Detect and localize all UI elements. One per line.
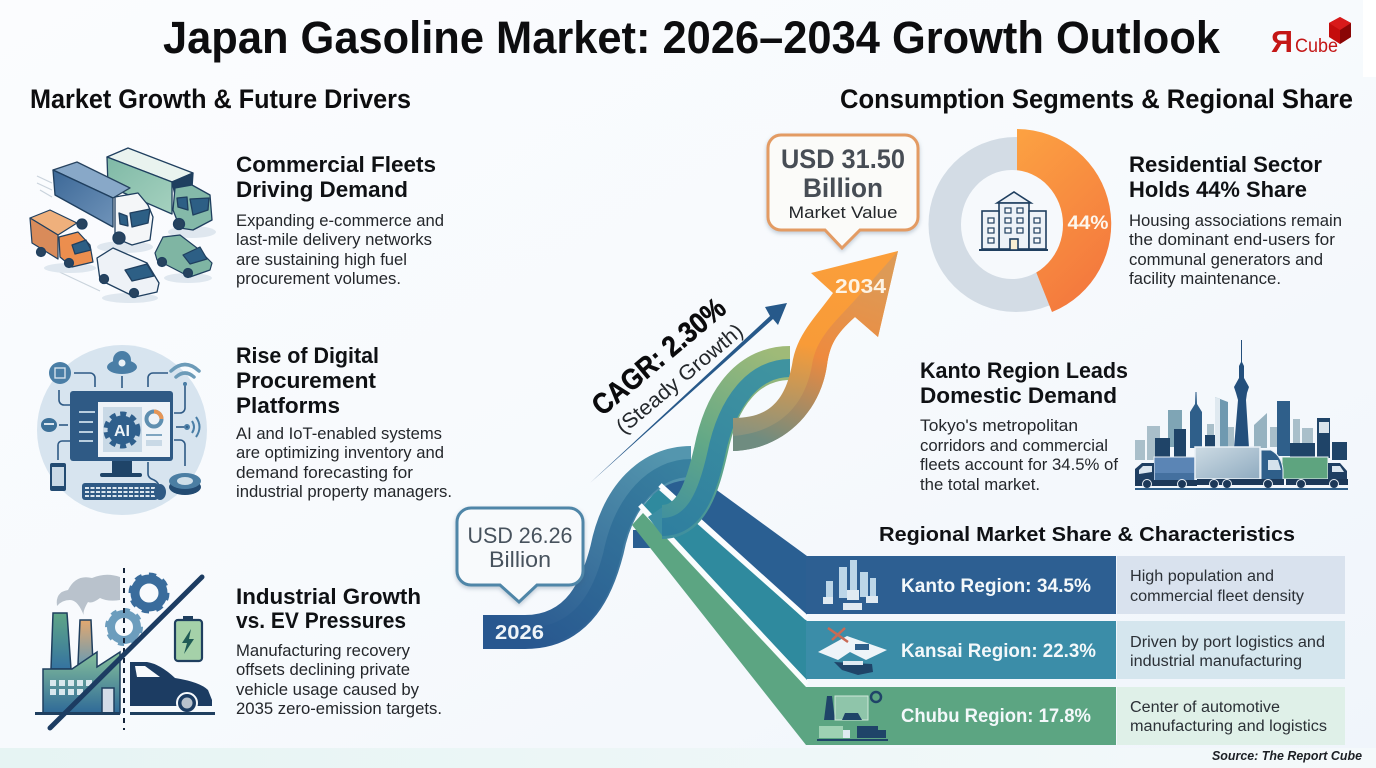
monitor — [70, 391, 173, 461]
body text: Housing associations remain — [1129, 212, 1342, 230]
description: commercial fleet density — [1130, 588, 1304, 605]
funnel band: Chubu — [632, 513, 806, 745]
description: High population and — [1130, 568, 1274, 585]
icon: factory vs EV — [35, 568, 215, 730]
gear: AI: AI — [114, 423, 130, 440]
icon: apartment building — [979, 192, 1048, 250]
middle truck — [1195, 447, 1284, 488]
heading: Commercial Fleets — [236, 152, 436, 177]
chimneys — [51, 613, 71, 669]
value label: 44% — [1068, 213, 1109, 234]
callout: 2034 value — [768, 135, 918, 248]
body text: corridors and commercial — [920, 437, 1108, 455]
CAGR label: CAGR: 2.30% — [586, 292, 732, 422]
keyboard — [82, 483, 158, 500]
panel: industrial growth — [35, 568, 442, 730]
panel: digital procurement — [37, 343, 452, 515]
heading: Industrial Growth — [236, 584, 421, 609]
description: industrial manufacturing — [1130, 653, 1302, 670]
smoke — [57, 575, 120, 616]
description: Center of automotive — [1130, 699, 1280, 716]
heading — [1129, 152, 1322, 202]
body text: fleets account for 34.5% of — [920, 456, 1118, 474]
year label 2026: 2026 — [495, 622, 544, 644]
funnel band: Kanto — [633, 472, 807, 615]
body text: Tokyo's metropolitan — [920, 417, 1078, 435]
heading: Platforms — [236, 393, 340, 418]
callout: 2034 value: Market Value — [788, 204, 898, 222]
left device — [41, 418, 57, 432]
orange truck — [30, 210, 93, 268]
body text: facility maintenance. — [1129, 270, 1281, 288]
logo: RCube: Я — [1271, 24, 1293, 59]
heading — [920, 358, 1128, 408]
ground — [35, 712, 215, 715]
row: Kanto — [806, 556, 1345, 614]
gear: AI — [106, 414, 138, 446]
callout: 2034 value: USD 31.50 — [781, 144, 905, 174]
cloud — [107, 351, 137, 374]
funnel band: Kansai — [642, 489, 807, 680]
gears — [135, 579, 163, 607]
white van — [97, 248, 159, 298]
body text: the dominant end-users for — [1129, 231, 1336, 249]
donut segment: 44% — [1017, 129, 1111, 312]
icon: factory and vehicles — [817, 692, 888, 741]
body text: communal generators and — [1129, 251, 1323, 269]
description — [1130, 634, 1325, 670]
icon: delivery trucks — [30, 148, 216, 303]
body text: vehicle usage caused by — [236, 681, 420, 699]
description — [1130, 568, 1304, 605]
callout: 2026 value: USD 26.26 — [468, 523, 572, 548]
arrow: CAGR — [590, 303, 787, 483]
body text: last-mile delivery networks — [236, 231, 432, 249]
description: manufacturing and logistics — [1130, 718, 1327, 735]
heading: consumption segments: Consumption Segments & Regional Share — [840, 84, 1353, 114]
CAGR sublabel: (Steady Growth) — [612, 319, 748, 439]
phone — [50, 463, 66, 491]
panel: regional market share table — [806, 524, 1345, 745]
body text — [1129, 212, 1342, 288]
panel: Kanto region — [920, 340, 1348, 494]
body text: are sustaining high fuel — [236, 251, 407, 269]
body text: Manufacturing recovery — [236, 642, 411, 660]
body text — [920, 417, 1118, 494]
heading: Holds 44% Share — [1129, 177, 1307, 202]
row: Chubu — [806, 687, 1345, 745]
ribbon: blue 2026 segment — [483, 463, 691, 637]
dashed divider — [123, 568, 125, 730]
panel: residential sector — [1129, 152, 1342, 288]
wifi — [171, 364, 199, 386]
description — [1130, 699, 1327, 735]
logo: RCube — [1271, 17, 1351, 59]
body text: industrial property managers. — [236, 483, 452, 501]
body text: demand forecasting for — [236, 464, 414, 482]
factory building — [43, 652, 120, 713]
heading: Rise of Digital — [236, 343, 379, 368]
body text: AI and IoT-enabled systems — [236, 425, 442, 443]
body text: offsets declining private — [236, 661, 410, 679]
right truck — [1282, 457, 1348, 488]
heading: Kanto Region Leads — [920, 358, 1128, 383]
body text: the total market. — [920, 476, 1040, 494]
callout: 2026 value: Billion — [489, 547, 551, 572]
row: Kansai — [806, 621, 1345, 679]
heading: market growth: Market Growth & Future Drivers — [30, 84, 411, 114]
panel: commercial fleets — [30, 148, 444, 303]
year label 2034: 2034 — [835, 276, 887, 298]
icon: Tokyo skyline and trucks — [1135, 340, 1348, 490]
blue truck — [53, 162, 153, 245]
body text: are optimizing inventory and — [236, 444, 444, 462]
Skytree tower — [1234, 340, 1249, 448]
heading: vs. EV Pressures — [236, 608, 406, 633]
heading line 2: Driving Demand — [236, 177, 408, 202]
left truck — [1135, 457, 1197, 488]
slash — [50, 577, 202, 728]
callout: 2034 value: Billion — [803, 173, 883, 203]
logo: RCube: Cube — [1295, 36, 1338, 57]
chart: growth ribbon — [457, 135, 918, 745]
body text — [236, 425, 452, 501]
car — [130, 662, 212, 706]
body text: Expanding e-commerce and — [236, 212, 444, 230]
ribbon: orange arrow to 2034 — [733, 251, 898, 451]
description: Driven by port logistics and — [1130, 634, 1325, 651]
heading: Procurement — [236, 368, 377, 393]
label: Kanto Region: 34.5% — [901, 576, 1091, 597]
heading: Regional Market Share & Characteristics — [879, 524, 1295, 546]
callout: 2026 value — [457, 508, 583, 602]
heading: Residential Sector — [1129, 152, 1322, 177]
body text: procurement volumes. — [236, 270, 401, 288]
heading — [236, 584, 421, 633]
body text — [236, 212, 444, 288]
body text: 2035 zero-emission targets. — [236, 700, 442, 718]
funnel stripes — [640, 485, 807, 684]
icon: city — [823, 560, 878, 610]
chip — [49, 362, 71, 384]
icon: AI platform — [37, 345, 207, 515]
label: Kansai Region: 22.3% — [901, 641, 1096, 662]
green truck — [107, 148, 212, 230]
heading — [236, 343, 379, 418]
signal — [185, 417, 200, 437]
heading: Domestic Demand — [920, 383, 1117, 408]
label: Chubu Region: 17.8% — [901, 706, 1091, 727]
donut chart: residential share — [928, 129, 1111, 312]
icon: port — [818, 628, 887, 675]
ribbon: green segment — [648, 363, 790, 538]
battery — [175, 616, 202, 661]
router — [169, 473, 201, 495]
body text — [236, 642, 442, 718]
source note: Source: The Report Cube — [1212, 749, 1362, 763]
green van — [155, 235, 212, 278]
title: Japan Gasoline Market: 2026–2034 Growth Outlook — [163, 12, 1221, 63]
